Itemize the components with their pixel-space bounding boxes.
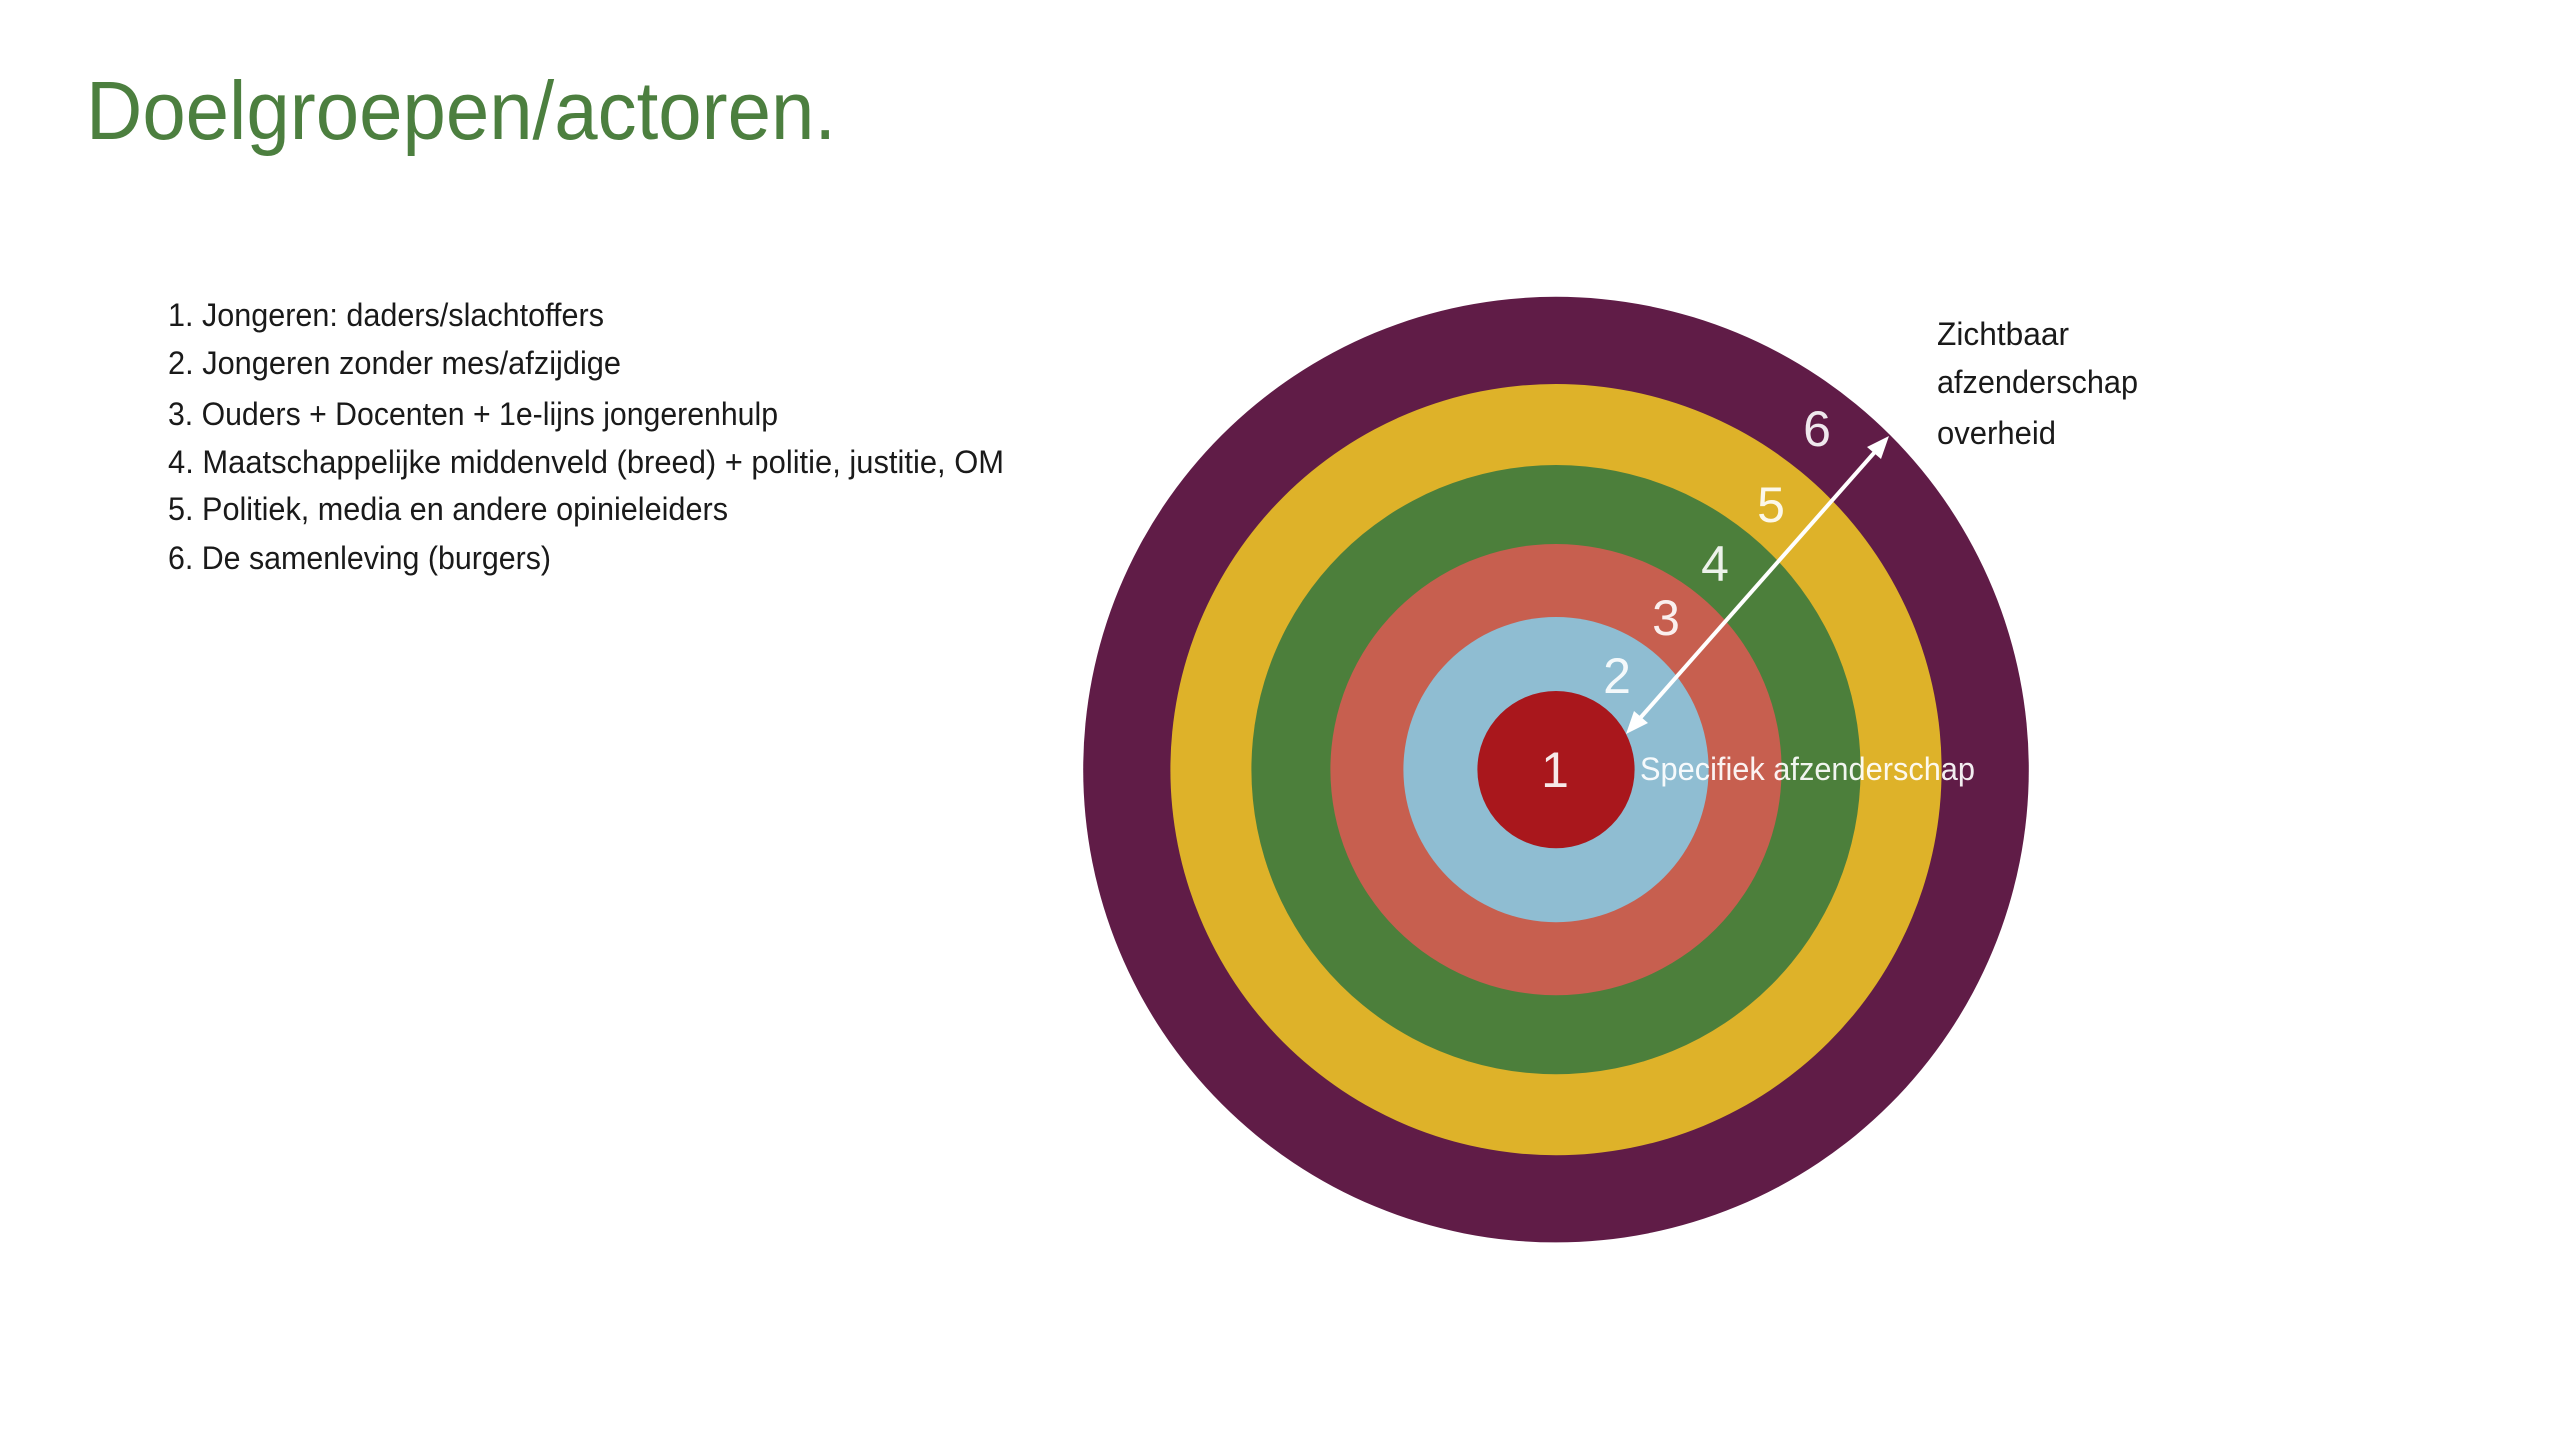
- ring 4: green: [1251, 465, 1861, 1074]
- list item 3: 3. Ouders + Docenten + 1e-lijns jongerenhulp: [168, 396, 778, 432]
- list item 5: 5. Politiek, media en andere opinieleiders: [168, 491, 728, 527]
- title: Doelgroepen/actoren.: [86, 64, 836, 157]
- label: visible government sender: [1937, 316, 2138, 451]
- label line 1: Zichtbaar: [1937, 316, 2069, 352]
- ring 5: yellow: [1170, 384, 1942, 1155]
- number 4: 4: [1701, 536, 1729, 592]
- list item 1: 1. Jongeren: daders/slachtoffers: [168, 297, 604, 333]
- ring 6: purple: [1083, 297, 2029, 1242]
- double-headed arrow: [1626, 436, 1889, 734]
- ring 3: coral: [1330, 544, 1782, 995]
- number 6: 6: [1803, 401, 1831, 457]
- number 5: 5: [1757, 477, 1785, 533]
- ring numbers: [1541, 401, 1831, 798]
- number 3: 3: [1652, 590, 1680, 646]
- legend list: [168, 297, 1004, 576]
- list item 4: 4. Maatschappelijke middenveld (breed) + politie, justitie, OM: [168, 444, 1004, 480]
- list item 6: 6. De samenleving (burgers): [168, 540, 551, 576]
- number 1: 1: [1541, 742, 1569, 798]
- ring 2: light blue: [1403, 617, 1709, 922]
- number 2: 2: [1603, 648, 1631, 704]
- list item 2: 2. Jongeren zonder mes/afzijdige: [168, 345, 621, 381]
- label: specific sender: Specifiek afzenderschap: [1640, 751, 1975, 787]
- label line 3: overheid: [1937, 415, 2056, 451]
- ring 1: red core: [1477, 691, 1635, 848]
- concentric target diagram: [1083, 297, 2029, 1242]
- label line 2: afzenderschap: [1937, 364, 2138, 400]
